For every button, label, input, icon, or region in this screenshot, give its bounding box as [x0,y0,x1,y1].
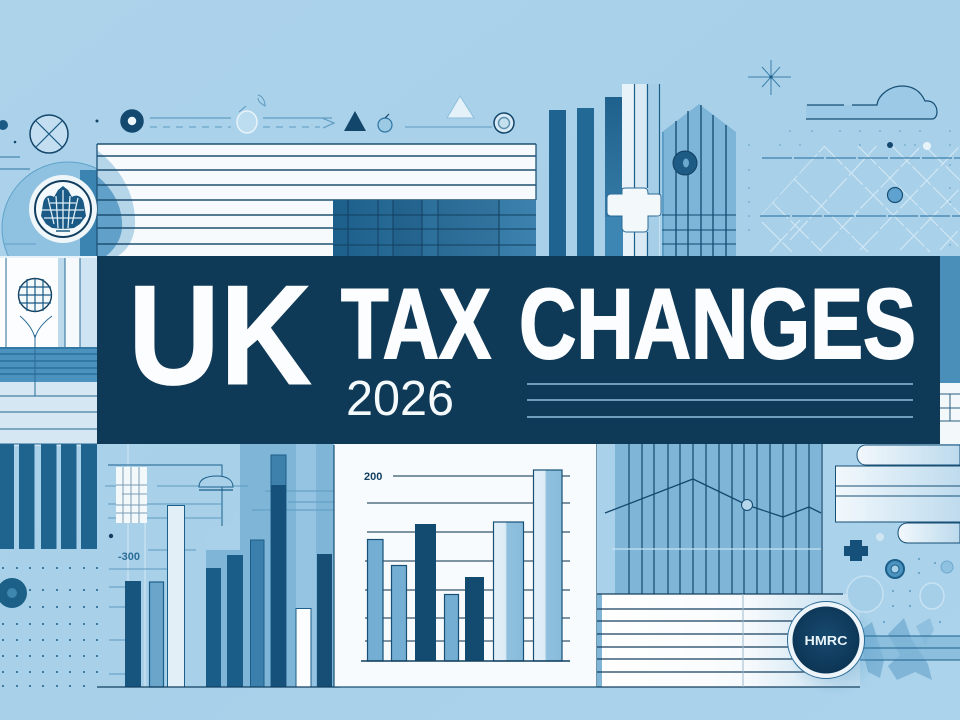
decorative text lines [527,384,913,417]
building shape [662,104,736,256]
icon: seal [29,175,97,243]
chart gridlines and axis label [364,471,570,641]
icon: cloud [806,86,937,119]
right stripes behind badge [860,636,960,660]
badge: HMRC [786,600,882,696]
panel: bottom-left bars [0,444,97,549]
top bars [549,84,660,256]
icon: dark disc [0,578,27,608]
title banner [97,256,940,444]
bar chart: left [97,444,340,687]
title: UK: UK [128,256,312,415]
dark grid block [333,200,536,256]
top icon row [0,95,514,169]
badge: HMRC: HMRC [804,633,848,648]
panel: bottom right lined table [597,594,860,687]
panel: bar chart centre [334,444,597,687]
panel: right pills and boxes [835,445,960,543]
panel: right edge strip [940,256,960,444]
panel: emblem circle [2,162,134,294]
year: 2026 [346,372,454,426]
title: tax changes: TAX [341,268,491,379]
dotted grid [2,567,98,687]
title: tax changes [341,268,916,379]
rounded tab [199,476,239,548]
diamond lattice panel [748,130,960,252]
decorative chevrons [858,618,934,680]
icon: globe [18,278,52,338]
small white grid [116,467,147,523]
panel: top lined table [97,144,536,256]
icon: star [748,60,791,95]
panel: line chart [597,444,822,594]
icon: white cross [607,188,661,232]
panel: left column [0,256,97,446]
chart gridlines and axis label: 200 [364,471,382,483]
small circles cluster [847,533,953,623]
axis label: -300 [118,551,140,563]
icon: dark plus [844,540,868,561]
